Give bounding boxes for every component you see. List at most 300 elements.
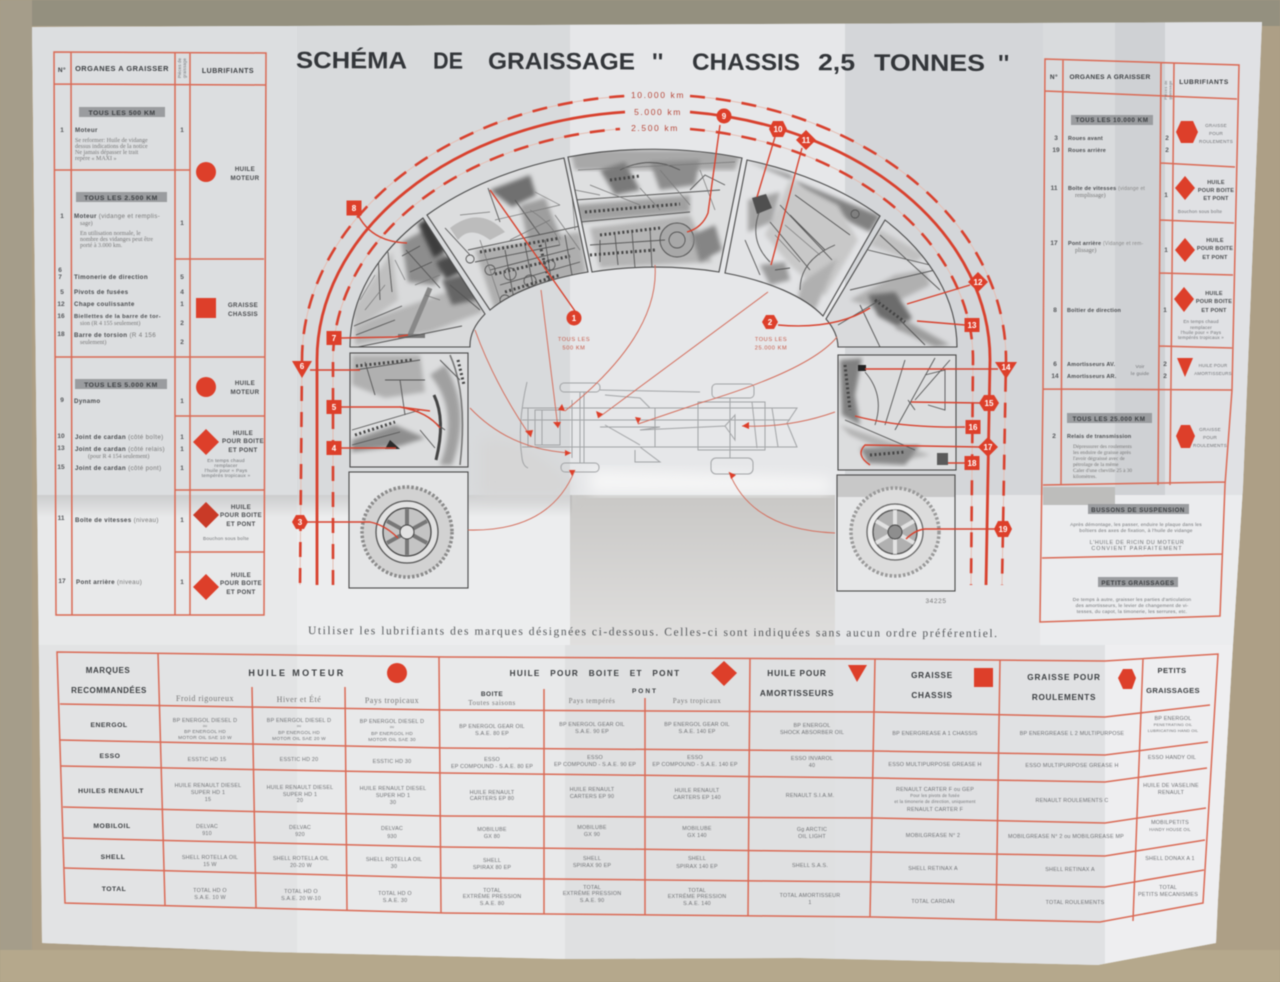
table grid <box>1040 59 1239 622</box>
track labels: 10.000 km <box>631 90 685 100</box>
section: tous les 10.000 km: plissage) <box>1075 247 1096 254</box>
marker 14: 14 <box>1002 363 1011 372</box>
column: huile pour boite et pont: SHELL <box>583 856 601 862</box>
marker 8 <box>346 200 362 216</box>
column: graisse pour roulements: ESSO MULTIPURPOSE GREASE H <box>1025 763 1119 769</box>
column: huile moteur: Froid rigoureux <box>176 694 234 703</box>
table header: N° <box>58 66 66 74</box>
lubricant: graisse roulements: GRAISSE <box>1199 427 1221 432</box>
brand names column: ENERGOL <box>90 722 128 729</box>
column: graisse pour roulements: MOBILGREASE N° 2 ou MOBILGREASE MP <box>1008 834 1124 840</box>
track: 10.000 km <box>300 96 1006 585</box>
column: huile moteur: 20-20 W <box>290 863 313 869</box>
column: huile pour boite et pont: ESSO <box>587 755 603 761</box>
section: tous les 500 km: Se reformer: Huile de vidange <box>75 137 148 144</box>
column: huile moteur: ESSTIC HD 30 <box>373 759 411 765</box>
section: tous les 2.500 km: 5 <box>180 274 184 281</box>
column: huile pour boite et pont: BOITE <box>481 691 503 698</box>
column: huile moteur <box>173 663 426 904</box>
marker 18 <box>964 456 980 470</box>
column: huile moteur: DELVAC <box>381 826 403 832</box>
section: tous les 25.000 km: pétrolage de la même <box>1073 462 1119 468</box>
section: tous les 5.000 km: 9 <box>60 397 64 404</box>
column: huile pour boite et pont: PONT <box>632 688 658 695</box>
column: huile moteur: SUPER HD 1 <box>191 790 225 796</box>
section: tous les 10.000 km: Roues arrière <box>1068 148 1106 154</box>
section: tous les 25.000 km: TOUS LES 25.000 KM <box>1073 416 1145 423</box>
column: huile pour boite et pont: BP ENERGOL GEAR OIL <box>459 724 525 730</box>
marker 12 <box>968 272 988 292</box>
column: huile pour boite et pont: HUILE RENAULT <box>675 788 720 794</box>
lubricant: huile boite et pont 3: POUR BOITE <box>220 580 262 587</box>
title: DE <box>433 48 463 74</box>
section: tous les 2.500 km: 2 <box>180 320 184 327</box>
column: graisse pour roulements: BP ENERGREASE L 2 MULTIPURPOSE <box>1020 731 1124 737</box>
section: tous les 500 km: 1 <box>180 127 184 134</box>
panel: recommended brands table <box>57 652 1218 922</box>
table header: Pièces de <box>177 58 182 78</box>
section: tous les 2.500 km: 1 <box>180 301 184 308</box>
column: graisse pour roulements: TOTAL ROULEMENTS <box>1046 900 1105 906</box>
track: 2.500 km <box>333 129 973 585</box>
column: huile pour boite et pont: Toutes saisons <box>468 699 516 707</box>
lubricant: huile amortisseurs: HUILE POUR <box>1199 363 1227 368</box>
marker 9: 9 <box>722 112 727 121</box>
block: petits graissages <box>1073 577 1191 615</box>
lubricant: huile boite et pont 1: ET PONT <box>228 447 258 454</box>
marker 18: 18 <box>968 459 977 468</box>
table header: LUBRIFIANTS <box>202 68 254 75</box>
column: huile moteur: S.A.E. 20 W-10 <box>281 896 321 902</box>
lubricant: huile boite et pont 1: remplacer <box>214 463 238 469</box>
column: huile moteur: SUPER HD 1 <box>283 792 317 798</box>
drawing reference number: 34225 <box>925 598 947 605</box>
column: huile pour boite et pont: CARTERS EP 140 <box>673 795 721 801</box>
column: petits graissages <box>1138 666 1200 898</box>
marker 6: 6 <box>300 362 305 371</box>
lubricant: huile moteur: HUILE <box>235 166 255 173</box>
illustration panel: transmission (12, 13) <box>826 220 957 347</box>
column: huile moteur: BP ENERGOL HD <box>184 729 226 735</box>
marker 19 <box>994 521 1012 537</box>
table header: ORGANES A GRAISSER <box>1069 74 1151 81</box>
column: huile pour boite et pont: S.A.E. 80 EP <box>475 731 509 737</box>
section: tous les 10.000 km <box>1050 115 1169 380</box>
section: tous les 2.500 km: Moteur (vidange et remplis- <box>74 213 160 220</box>
brand names column <box>71 666 147 893</box>
section: tous les 25.000 km <box>1052 413 1152 480</box>
title: GRAISSAGE <box>488 48 635 74</box>
lubricant: huile boite et pont: HUILE <box>1205 291 1223 297</box>
track labels: 2.500 km <box>631 123 679 133</box>
column: huile pour amortisseurs: ESSO INVAROL <box>791 756 833 762</box>
column: graisse pour roulements: ROULEMENTS <box>1032 693 1096 702</box>
column: graisse pour roulements <box>1008 669 1136 906</box>
section: tous les 25.000 km: les enduire de graisse après <box>1073 450 1131 456</box>
lubricant: huile boite et pont 2: POUR BOITE <box>220 512 262 519</box>
section: tous les 25.000 km: 2 <box>1052 433 1056 440</box>
column: petits graissages: HANDY HOUSE OIL <box>1149 827 1191 832</box>
column: huile pour boite et pont: HUILE RENAULT <box>470 790 515 796</box>
lubricant: graisse roulements: POUR <box>1209 131 1224 136</box>
lubricant: huile boite et pont: remplacer <box>1190 325 1212 330</box>
marker 5: 5 <box>332 403 337 412</box>
marker 12: 12 <box>974 278 983 287</box>
section: tous les 2.500 km: Biellettes de la barre de tor- <box>74 314 161 320</box>
section: tous les 10.000 km: Amortisseurs AR. <box>1067 374 1117 380</box>
section: tous les 2.500 km: sage) <box>80 220 93 227</box>
section: tous les 2.500 km: 2 <box>180 339 184 346</box>
section: tous les 500 km: Moteur <box>75 127 98 134</box>
section: tous les 500 km: Ne jamais dépasser le trait <box>75 150 139 156</box>
marker 1 <box>566 310 582 326</box>
section: tous les 2.500 km: 6 <box>58 267 62 274</box>
column: huile pour amortisseurs: BP ENERGOL <box>794 723 830 729</box>
column: huile moteur: BP ENERGOL DIESEL D <box>267 718 331 724</box>
column: huile moteur: ou <box>297 724 301 728</box>
lubricant: huile moteur 5.000 km: HUILE <box>235 380 255 387</box>
column: huile pour amortisseurs: RENAULT S.I.A.M. <box>786 793 834 799</box>
section: tous les 25.000 km: kilomètres. <box>1073 474 1097 480</box>
column: huile moteur: Pays tropicaux <box>365 696 419 705</box>
illustration panel: gearbox side <box>725 160 880 316</box>
lubricant: huile boite et pont 2: HUILE <box>231 504 251 511</box>
section: tous les 5.000 km: 1 <box>180 434 184 441</box>
column: huile moteur: HUILE RENAULT DIESEL <box>267 785 333 791</box>
lubricant: huile boite et pont: En temps chaud <box>1183 319 1219 324</box>
column: graisse chassis: RENAULT CARTER F ou GEP <box>896 787 974 793</box>
illustration panel: rear wheel (19) <box>837 475 955 591</box>
section: tous les 10.000 km: 2 <box>1163 361 1167 368</box>
column: huile pour boite et pont: BP ENERGOL GEAR OIL <box>559 722 625 728</box>
column: huile moteur: 30 <box>390 800 396 806</box>
column: huile moteur: TOTAL HD O <box>378 891 412 897</box>
lubricant: graisse roulements: GRAISSE <box>1205 123 1227 128</box>
illustration panel: rear axle (14-18) <box>838 355 956 470</box>
column: graisse chassis: et la timonerie de direction, uniquement <box>894 799 976 804</box>
note: tous les 500 km: TOUS LES <box>558 337 590 343</box>
column: graisse chassis: BP ENERGREASE A 1 CHASSIS <box>892 731 978 737</box>
column: graisse chassis: TOTAL CARDAN <box>911 899 955 905</box>
marker 7 <box>326 331 342 345</box>
column: huile pour boite et pont: Pays tropicaux <box>673 697 721 705</box>
column: huile moteur: BP ENERGOL HD <box>371 731 413 737</box>
section: tous les 10.000 km: Voir <box>1135 364 1145 370</box>
section: tous les 5.000 km: 17 <box>58 578 66 585</box>
section: tous les 2.500 km: seulement) <box>80 339 106 346</box>
column: huile pour boite et pont: EXTRÊME PRESSION <box>563 889 621 897</box>
column: huile pour boite et pont: SPIRAX 90 EP <box>573 863 611 869</box>
section: tous les 25.000 km: Relais de transmission <box>1067 434 1132 440</box>
lubricant: huile boite et pont <box>1174 287 1232 340</box>
column: huile pour boite et pont: EP COMPOUND - S.A.E. 90 EP <box>554 762 636 768</box>
section: tous les 5.000 km: (pour R 4 154 seulement) <box>88 453 149 460</box>
column: huile pour amortisseurs: OIL LIGHT <box>798 834 826 840</box>
column: huile moteur: TOTAL HD O <box>193 888 227 894</box>
lubricant: huile amortisseurs: AMORTISSEURS <box>1194 371 1232 376</box>
column: huile pour boite et pont: SPIRAX 140 EP <box>676 864 718 870</box>
column: huile pour boite et pont: SHELL <box>483 858 501 864</box>
lubricant: huile boite et pont 3 <box>193 572 262 600</box>
column: huile pour boite et pont: Pays tempérés <box>569 697 615 705</box>
instruction sentence: Utiliser les lubrifiants des marques désignées ci-dessous. Celles-ci sont indiquées sans aucun ordre préférentiel. <box>308 625 997 640</box>
panel: left maintenance table <box>54 52 266 615</box>
title: '' <box>998 50 1009 76</box>
section: tous les 5.000 km: 13 <box>57 445 65 452</box>
lubricant: huile boite et pont 3: ET PONT <box>226 589 256 596</box>
marker 5 <box>326 400 342 414</box>
lubricant: huile boite et pont: POUR BOITE <box>1196 299 1232 305</box>
section: tous les 10.000 km: 19 <box>1052 147 1060 154</box>
marker 14 <box>995 362 1017 379</box>
section: tous les 5.000 km: Joint de cardan (côté relais) <box>75 446 165 453</box>
column: petits graissages: TOTAL <box>1159 885 1177 891</box>
section: tous les 2.500 km: En utilisation normale, le <box>80 231 141 237</box>
lubricant: huile boite et pont: Bouchon sous boîte <box>1178 209 1222 214</box>
column: huile pour boite et pont: TOTAL <box>483 888 501 894</box>
column: huile moteur: ESSTIC HD 15 <box>188 757 226 763</box>
lubricant: huile boite et pont 2: Bouchon sous boîte <box>203 536 249 542</box>
column: huile moteur: HUILE RENAULT DIESEL <box>360 786 426 792</box>
column: huile pour boite et pont: S.A.E. 140 <box>683 901 711 907</box>
block: petits graissages: De temps à autre, graisser les parties d'articulation <box>1073 597 1191 603</box>
illustration panel: front axle (4, 5, 6) <box>350 353 468 467</box>
column: huile moteur: 910 <box>202 831 212 837</box>
illustration panel: engine (1) <box>427 158 588 310</box>
section: tous les 5.000 km: Dynamo <box>74 398 101 405</box>
illustration panel: steering joint (8, 7) <box>350 218 485 347</box>
column: huile moteur: 930 <box>387 834 397 840</box>
marker 10: 10 <box>774 125 783 134</box>
column: huile pour boite et pont: S.A.E. 90 <box>580 898 604 904</box>
marker 8: 8 <box>352 204 357 213</box>
section: tous les 5.000 km: 10 <box>57 433 65 440</box>
section: tous les 10.000 km: 2 <box>1163 373 1167 380</box>
column: graisse chassis <box>888 668 993 905</box>
section: tous les 5.000 km: 1 <box>180 465 184 472</box>
note: tous les 25.000 km: 25.000 KM <box>755 346 787 352</box>
column: huile moteur: SUPER HD 1 <box>376 793 410 799</box>
column: huile pour amortisseurs: Gg ARCTIC <box>797 827 827 833</box>
column: huile moteur: SHELL ROTELLA OIL <box>273 856 329 862</box>
lubricant: huile boite et pont: tempérés tropicaux » <box>1178 335 1224 340</box>
section: tous les 500 km: repère « MAXI » <box>75 156 116 162</box>
column: graisse chassis: SHELL RETINAX A <box>908 866 958 872</box>
column: huile moteur: MOTOR OIL SAE 30 <box>368 737 416 743</box>
block: buissons de suspension: Après démontage, les passer, enduire le plaque dans les <box>1070 522 1202 528</box>
column: huile pour boite et pont: GX 140 <box>687 833 707 839</box>
column: huile moteur: SHELL ROTELLA OIL <box>182 855 238 861</box>
marker 13: 13 <box>968 321 977 330</box>
table header <box>58 57 254 78</box>
section: tous les 2.500 km: 18 <box>57 331 65 338</box>
lubricant: huile boite et pont 1: tempérés tropicaux » <box>202 473 251 479</box>
lubricant: huile boite et pont 1: POUR BOITE <box>222 438 264 445</box>
section: tous les 25.000 km: l'avoir dégraissé avec de <box>1073 456 1125 462</box>
section: tous les 5.000 km: TOUS LES 5.000 KM <box>84 382 158 389</box>
lubricant: huile boite et pont 2: ET PONT <box>226 521 256 528</box>
marker 11 <box>796 130 816 150</box>
column: huile pour amortisseurs: 1 <box>808 900 812 906</box>
lubricant: huile boite et pont 3: HUILE <box>231 572 251 579</box>
title: '' <box>652 49 663 75</box>
block: buissons de suspension: boîtiers des axes de fixation, à l'huile de vidange <box>1079 528 1193 534</box>
section: tous les 10.000 km: 11 <box>1051 185 1058 192</box>
column: huile pour boite et pont: EXTRÊME PRESSION <box>668 892 726 900</box>
column: huile moteur: SHELL ROTELLA OIL <box>366 857 422 863</box>
lubricant: graisse roulements <box>1176 121 1233 144</box>
marker 2: 2 <box>768 318 773 327</box>
lubricant: huile boite et pont: ET PONT <box>1202 255 1228 261</box>
section: tous les 25.000 km: Dépressurer des roulements <box>1073 444 1132 450</box>
small target arrows on chassis <box>525 404 749 479</box>
section: tous les 2.500 km: TOUS LES 2.500 KM <box>84 195 158 202</box>
column: huile pour boite et pont: CARTERS EP 90 <box>570 794 614 800</box>
marker 15: 15 <box>985 399 994 408</box>
column: huile moteur: DELVAC <box>196 824 218 830</box>
marker 1: 1 <box>572 314 577 323</box>
column: huile pour boite et pont: EP COMPOUND - S.A.E. 80 EP <box>451 764 533 770</box>
table header: graissage <box>182 58 187 78</box>
block: buissons de suspension: BUSSONS DE SUSPENSION <box>1091 507 1185 514</box>
note: tous les 500 km: 500 KM <box>563 346 585 352</box>
column: graisse pour roulements: SHELL RETINAX A <box>1045 867 1095 873</box>
column: huile moteur: MOTOR OIL SAE 10 W <box>178 735 232 741</box>
section: tous les 5.000 km: 15 <box>57 464 65 471</box>
section: tous les 10.000 km: Boîte de vitesses (vidange et <box>1068 186 1145 192</box>
section: tous les 2.500 km: 16 <box>57 313 65 320</box>
marker 4 <box>326 441 342 455</box>
column: huile pour boite et pont: EXTRÊME PRESSION <box>463 892 521 900</box>
column: huile pour boite et pont <box>451 661 738 907</box>
lubricant: graisse chassis <box>196 298 258 318</box>
column: huile moteur: ESSTIC HD 20 <box>280 757 318 763</box>
column: huile pour boite et pont: EP COMPOUND - S.A.E. 140 EP <box>652 762 738 768</box>
section: tous les 5.000 km: 1 <box>180 446 184 453</box>
column: huile pour boite et pont: MOBILUBE <box>577 825 607 831</box>
column: graisse chassis: RENAULT CARTER F <box>907 807 964 813</box>
column: huile moteur: HUILE MOTEUR <box>248 668 346 678</box>
marker 11: 11 <box>802 136 811 145</box>
column: huile moteur: 15 <box>205 797 211 803</box>
marker 17 <box>978 437 998 457</box>
column: huile pour boite et pont: ESSO <box>687 755 703 761</box>
column: huile pour boite et pont: TOTAL <box>688 888 706 894</box>
brand names column: RECOMMANDÉES <box>71 686 147 695</box>
marker 19: 19 <box>999 525 1008 534</box>
marker 17: 17 <box>984 443 993 452</box>
column: huile pour boite et pont: GX 90 <box>584 832 600 838</box>
column: graisse chassis: GRAISSE <box>911 671 953 680</box>
column: huile moteur: MOTOR OIL SAE 20 W <box>272 736 326 742</box>
chassis plan view <box>520 382 797 474</box>
column: huile pour boite et pont: SPIRAX 80 EP <box>473 865 511 871</box>
illustration panel: front wheel (3) <box>349 472 468 588</box>
section: tous les 2.500 km: 4 <box>180 289 184 296</box>
section: tous les 10.000 km: Boîtier de direction <box>1067 308 1122 314</box>
column: graisse chassis: Pour les pivots de fusée <box>910 793 960 798</box>
brand names column: ESSO <box>100 753 120 760</box>
marker 6 <box>292 361 312 378</box>
table header: Pièces de <box>1163 80 1168 100</box>
section: tous les 500 km: dessus indications de la notice <box>75 144 148 150</box>
column: huile pour boite et pont: CARTERS EP 80 <box>470 796 514 802</box>
lubricant: huile boite et pont 1: En temps chaud <box>207 458 245 464</box>
column: huile pour amortisseurs: HUILE POUR <box>767 669 827 678</box>
lubricant: huile boite et pont 1: l'huile pour « Pays <box>205 468 248 474</box>
section: tous les 10.000 km: 2 <box>1165 147 1169 154</box>
distance tracks <box>300 90 1006 585</box>
table header: N° <box>1050 73 1058 81</box>
table header <box>1050 73 1229 100</box>
section: tous les 10.000 km: 6 <box>1053 361 1057 368</box>
section: tous les 2.500 km: 5 <box>60 289 64 296</box>
section: tous les 10.000 km: 8 <box>1053 307 1057 314</box>
column: petits graissages: ESSO HANDY OIL <box>1148 755 1196 761</box>
marker 3: 3 <box>298 518 303 527</box>
column: graisse pour roulements: RENAULT ROULEMENTS C <box>1036 798 1108 804</box>
block: buissons de suspension: L'HUILE DE RICIN DU MOTEUR <box>1090 540 1184 546</box>
marker 2 <box>762 315 778 329</box>
column: huile pour amortisseurs: AMORTISSEURS <box>760 689 834 698</box>
thin lubrication leaders <box>468 265 837 533</box>
lubricant: huile boite et pont: ET PONT <box>1203 196 1229 202</box>
brand names column: HUILES RENAULT <box>78 788 144 795</box>
lubricant: graisse roulements: ROULEMENTS <box>1199 139 1233 144</box>
section: tous les 10.000 km: 1 <box>1163 307 1167 314</box>
column: huile pour amortisseurs <box>760 665 867 906</box>
title: TONNES <box>874 50 985 76</box>
section: tous les 2.500 km: Barre de torsion (R 4 156 <box>74 332 156 339</box>
column: huile moteur: ou <box>390 725 394 729</box>
lubricant: graisse chassis: CHASSIS <box>228 311 258 318</box>
lubricant: huile boite et pont: POUR BOITE <box>1197 246 1233 252</box>
column: huile moteur: DELVAC <box>289 825 311 831</box>
column: huile pour boite et pont: S.A.E. 90 EP <box>575 729 609 735</box>
column: petits graissages: HUILE DE VASELINE <box>1143 783 1199 789</box>
column: petits graissages: RENAULT <box>1158 790 1185 796</box>
section: tous les 500 km <box>60 107 184 162</box>
column: huile moteur: 920 <box>295 832 305 838</box>
table header: LUBRIFIANTS <box>1179 79 1229 86</box>
column: huile pour boite et pont: SHELL <box>688 856 706 862</box>
title: SCHÉMA <box>296 46 407 73</box>
brand names column: MARQUES <box>86 666 130 675</box>
column: huile moteur: TOTAL HD O <box>284 889 318 895</box>
section: tous les 5.000 km: 11 <box>58 515 65 522</box>
section: tous les 25.000 km: Caler d'une cheville 25 à 30 <box>1073 468 1132 474</box>
section: tous les 10.000 km: TOUS LES 10.000 KM <box>1076 117 1148 124</box>
column: huile pour boite et pont: TOTAL <box>583 885 601 891</box>
column: huile pour boite et pont: HUILE POUR BOITE ET PONT <box>510 669 680 678</box>
lubricant: huile boite et pont: l'huile pour « Pays <box>1181 330 1222 335</box>
lubricant: huile moteur 5.000 km <box>196 377 260 397</box>
title: CHASSIS <box>692 49 800 75</box>
section: tous les 5.000 km: 1 <box>180 517 184 524</box>
block: petits graissages: des amortisseurs, le levier de changement de vi- <box>1076 603 1189 609</box>
marker 16: 16 <box>969 423 978 432</box>
lubricant: huile boite et pont 1: HUILE <box>233 430 253 437</box>
column: huile moteur: BP ENERGOL HD <box>278 730 320 736</box>
section: tous les 5.000 km <box>57 379 184 586</box>
column: petits graissages: GRAISSAGES <box>1146 686 1200 695</box>
column: petits graissages: PETITS <box>1158 666 1186 675</box>
column: graisse chassis: ESSO MULTIPURPOSE GREASE H <box>888 762 982 768</box>
note: tous les 25.000 km: TOUS LES <box>755 337 787 343</box>
column: huile pour boite et pont: S.A.E. 140 EP <box>678 729 716 735</box>
section: tous les 5.000 km: 1 <box>180 398 184 405</box>
column: huile pour boite et pont: MOBILUBE <box>682 826 712 832</box>
